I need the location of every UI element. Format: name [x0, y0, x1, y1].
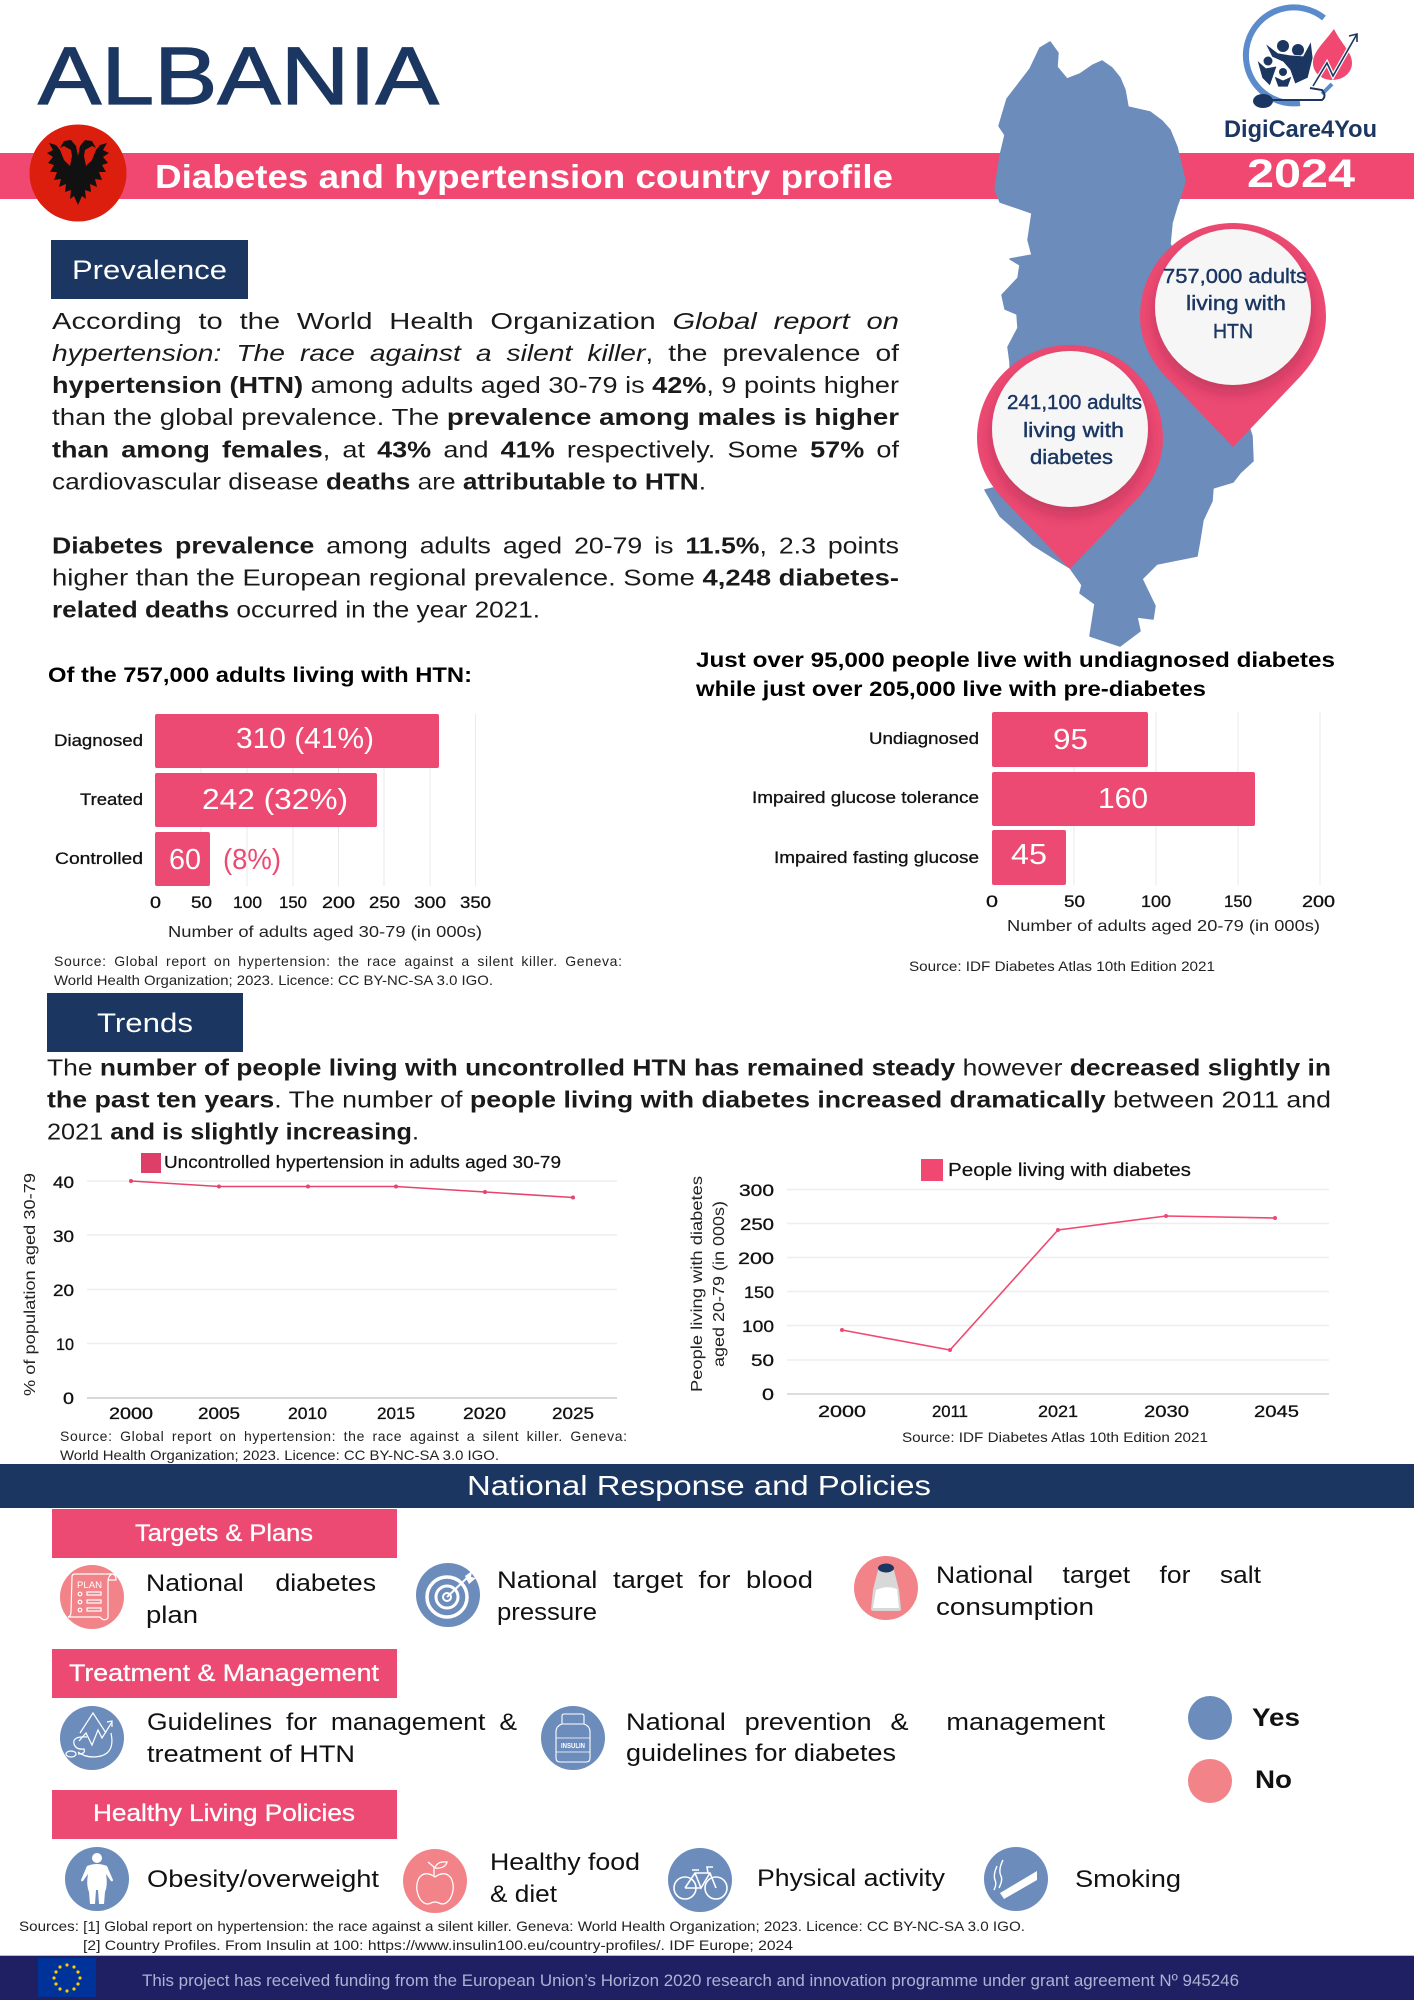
text: healthy food and diet: Healthy food — [490, 1849, 640, 1876]
title: ALBANIA — [38, 31, 439, 122]
bar chart: HTN care cascade: Number of adults aged 30-79 (in 000s) — [168, 924, 482, 941]
logo: DigiCare4You: DigiCare4You — [1224, 116, 1377, 143]
callout: HTN pin: 757,000 adults — [1163, 266, 1307, 288]
line chart: uncontrolled hypertension: 10 — [56, 1336, 74, 1354]
text: national target for blood pressure — [497, 1567, 813, 1626]
source: left line chart: World Health Organization; 2023. Licence: CC BY-NC-SA 3.0 IGO. — [60, 1447, 499, 1463]
text: national target for salt consumption: consumption — [936, 1594, 1094, 1621]
bar chart: diabetes and pre-diabetes: Impaired glucose tolerance — [752, 788, 979, 807]
bar chart: HTN care cascade: (8%) — [223, 844, 281, 876]
line chart: uncontrolled hypertension: 20 — [53, 1282, 74, 1300]
callout: diabetes pin: living with — [1023, 420, 1124, 442]
bar chart: HTN care cascade: 0 — [150, 894, 161, 912]
callout: diabetes pin — [977, 345, 1163, 569]
line chart: uncontrolled hypertension — [22, 1152, 617, 1423]
text block: sources: [2] Country Profiles. From Insulin at 100: https://www.insulin100.eu/country-profiles/. IDF Europe; 2024 — [83, 1937, 793, 1953]
bar chart: HTN care cascade: 350 — [460, 894, 491, 912]
map of Albania — [985, 42, 1253, 646]
line chart: people living with diabetes: 2021 — [1038, 1403, 1078, 1421]
line chart: uncontrolled hypertension: 2020 — [463, 1405, 506, 1423]
text block: hypertension prevalence: hypertension: The race against a silent killer , the prevalence of — [52, 340, 900, 366]
line chart: people living with diabetes: 2030 — [1144, 1403, 1189, 1421]
chart heading: undiagnosed diabetes — [695, 648, 1335, 701]
text block: hypertension prevalence: than among females , at 43% and 41% respectively. Some 57% of — [52, 436, 900, 462]
bar chart: HTN care cascade: 300 — [414, 894, 446, 912]
icon: insulin vial — [541, 1706, 605, 1770]
icon: EU flag — [38, 1958, 96, 1997]
icon: blood pressure target — [416, 1563, 480, 1627]
text block: hypertension prevalence — [52, 308, 900, 494]
icon: national diabetes plan — [60, 1565, 124, 1629]
source: right line chart: Source: IDF Diabetes Atlas 10th Edition 2021 — [902, 1429, 1208, 1445]
icon: HTN guidelines — [60, 1706, 124, 1770]
bar chart: diabetes and pre-diabetes: 150 — [1224, 893, 1252, 911]
text block: trends summary: the past ten years . The number of people living with diabetes increased dramatically between 2011 and — [47, 1086, 1331, 1112]
line chart: people living with diabetes: 100 — [742, 1318, 774, 1336]
bar chart: HTN care cascade: 150 — [279, 894, 307, 912]
bar chart: diabetes and pre-diabetes: Undiagnosed — [869, 729, 979, 748]
bar chart: diabetes and pre-diabetes — [752, 712, 1335, 935]
heading: Prevalence: Prevalence — [72, 255, 227, 285]
callout: diabetes pin: 241,100 adults — [1007, 392, 1142, 414]
chart heading: undiagnosed diabetes: Just over 95,000 people live with undiagnosed diabetes — [696, 648, 1335, 672]
icon: national diabetes plan: PLAN — [77, 1580, 102, 1591]
icon: bicycle — [668, 1848, 732, 1912]
heading: Targets & Plans: Targets & Plans — [135, 1520, 313, 1547]
bar chart: HTN care cascade: 60 — [169, 844, 201, 876]
heading: Healthy Living Policies — [52, 1790, 397, 1839]
bar chart: HTN care cascade: Controlled — [55, 849, 143, 868]
bar chart: diabetes and pre-diabetes: 160 — [1098, 783, 1148, 815]
source: left chart — [54, 953, 622, 988]
text: national target for blood pressure: National target for blood — [497, 1567, 813, 1594]
text: funding statement: This project has received funding from the European Union’s Horizon 2020 research and innovation programme under grant agreement Nº 945246 — [142, 1971, 1239, 1990]
heading: Healthy Living Policies: Healthy Living Policies — [93, 1800, 355, 1827]
text: physical activity: Physical activity — [757, 1865, 945, 1892]
icon: insulin vial: INSULIN — [561, 1741, 585, 1750]
icon: smoking — [984, 1847, 1048, 1911]
text: guidelines for HTN: treatment of HTN — [147, 1741, 355, 1768]
icon: obesity — [65, 1847, 129, 1911]
text block: hypertension prevalence: than the global prevalence. The prevalence among males is higher — [52, 404, 899, 430]
heading: Treatment & Management: Treatment & Management — [69, 1660, 379, 1687]
line chart: uncontrolled hypertension: 30 — [53, 1228, 74, 1246]
heading: Trends — [47, 993, 243, 1052]
text block: hypertension prevalence: According to the World Health Organization Global report on — [52, 308, 899, 334]
heading: Trends: Trends — [97, 1008, 193, 1038]
footer band — [0, 1955, 1414, 2000]
year: 2024 — [1247, 152, 1356, 196]
bar chart: diabetes and pre-diabetes: Number of adults aged 20-79 (in 000s) — [1007, 918, 1320, 935]
icon: Albanian flag circle — [30, 124, 126, 222]
text: national target for blood pressure: pressure — [497, 1599, 597, 1626]
callout: HTN pin — [1140, 223, 1326, 447]
text: national target for salt consumption: National target for salt — [936, 1562, 1261, 1589]
source: right chart: Source: IDF Diabetes Atlas 10th Edition 2021 — [909, 958, 1215, 974]
text block: trends summary — [47, 1054, 1331, 1144]
section band: National Response and Policies: National Response and Policies — [467, 1470, 931, 1501]
heading: Treatment & Management — [52, 1649, 397, 1698]
line chart: uncontrolled hypertension: 2025 — [552, 1405, 594, 1423]
bar chart: diabetes and pre-diabetes: Impaired fasting glucose — [774, 848, 979, 867]
line chart: people living with diabetes: People living with diabetes — [689, 1176, 706, 1392]
text block: sources — [19, 1918, 1025, 1953]
line chart: people living with diabetes: 50 — [751, 1352, 774, 1370]
callout: HTN pin: HTN — [1213, 321, 1253, 343]
bar chart: HTN care cascade: Diagnosed — [54, 731, 143, 750]
bar chart: HTN care cascade: 200 — [322, 894, 355, 912]
text: national prevention guidelines: guidelines for diabetes — [626, 1740, 896, 1767]
line chart: people living with diabetes: 200 — [738, 1250, 774, 1268]
text: guidelines for HTN — [147, 1709, 517, 1768]
line chart: people living with diabetes: 0 — [762, 1386, 774, 1404]
bar chart: diabetes and pre-diabetes: 45 — [1011, 839, 1047, 871]
line chart: people living with diabetes: 250 — [740, 1216, 774, 1234]
section band: National Response and Policies — [0, 1464, 1414, 1508]
source: left chart: World Health Organization; 2023. Licence: CC BY-NC-SA 3.0 IGO. — [54, 972, 493, 988]
bar chart: diabetes and pre-diabetes: 0 — [986, 893, 998, 911]
icon: salt shaker — [854, 1556, 918, 1620]
bar chart: diabetes and pre-diabetes: 100 — [1141, 893, 1171, 911]
legend: yes and no: Yes — [1252, 1704, 1300, 1732]
bar chart: HTN care cascade — [54, 714, 491, 941]
bar chart: diabetes and pre-diabetes: 200 — [1302, 893, 1335, 911]
callout: diabetes pin: diabetes — [1030, 447, 1113, 469]
bar chart: diabetes and pre-diabetes: 95 — [1053, 724, 1088, 756]
text block: trends summary: 2021 and is slightly increasing . — [47, 1118, 419, 1144]
icon: apple — [403, 1849, 467, 1913]
chart heading: HTN care cascade: Of the 757,000 adults living with HTN: — [48, 663, 472, 687]
line chart: uncontrolled hypertension: 2010 — [288, 1405, 327, 1423]
bar chart: HTN care cascade: Treated — [80, 790, 143, 809]
text: national prevention guidelines — [626, 1709, 1105, 1767]
heading: Prevalence — [51, 240, 248, 299]
legend: people living with diabetes: People living with diabetes — [948, 1160, 1191, 1180]
line chart: uncontrolled hypertension: 2015 — [377, 1405, 415, 1423]
line chart: people living with diabetes: 2000 — [818, 1403, 866, 1421]
bar chart: HTN care cascade: 242 (32%) — [202, 784, 348, 816]
bar chart: diabetes and pre-diabetes: 50 — [1064, 893, 1085, 911]
logo: DigiCare4You — [1224, 7, 1377, 143]
legend: yes and no — [1188, 1696, 1300, 1803]
text: healthy food and diet — [490, 1849, 640, 1908]
bar chart: HTN care cascade: 310 (41%) — [236, 723, 374, 755]
source: left chart: Source: Global report on hypertension: the race against a silent killer. Geneva: — [54, 953, 622, 969]
line chart: people living with diabetes: aged 20-79 (in 000s) — [711, 1201, 728, 1367]
bar chart: HTN care cascade: 100 — [233, 894, 262, 912]
line chart: uncontrolled hypertension: 40 — [53, 1174, 74, 1192]
text block: diabetes prevalence: Diabetes prevalence among adults aged 20-79 is 11.5% , 2.3 points — [52, 532, 899, 558]
text: healthy food and diet: & diet — [490, 1881, 557, 1908]
source: left line chart — [60, 1428, 627, 1463]
text block: trends summary: The number of people living with uncontrolled HTN has remained steady however decreased slightly in — [47, 1054, 1331, 1080]
banner band — [0, 153, 1414, 199]
text: national prevention guidelines: National prevention & management — [626, 1709, 1105, 1736]
line chart: people living with diabetes: 150 — [744, 1284, 774, 1302]
text: national target for salt consumption — [936, 1562, 1261, 1621]
text block: diabetes prevalence — [52, 532, 899, 622]
line chart: people living with diabetes: 2011 — [932, 1403, 968, 1421]
text block: diabetes prevalence: related deaths occurred in the year 2021. — [52, 596, 540, 622]
legend: yes and no: No — [1255, 1766, 1292, 1794]
bar chart: HTN care cascade: 250 — [369, 894, 400, 912]
line chart: people living with diabetes — [689, 1159, 1329, 1421]
line chart: people living with diabetes: 300 — [739, 1182, 774, 1200]
text block: diabetes prevalence: higher than the European regional prevalence. Some 4,248 diabetes- — [52, 564, 899, 590]
text: national diabetes plan: plan — [146, 1602, 198, 1629]
line chart: people living with diabetes: 2045 — [1254, 1403, 1299, 1421]
text: smoking: Smoking — [1075, 1866, 1181, 1893]
line chart: uncontrolled hypertension: % of population aged 30-79 — [22, 1173, 39, 1396]
callout: HTN pin: living with — [1186, 293, 1286, 315]
heading: Targets & Plans — [52, 1509, 397, 1558]
line chart: uncontrolled hypertension: 2005 — [198, 1405, 240, 1423]
text block: hypertension prevalence: hypertension (HTN) among adults aged 30-79 is 42% , 9 points higher — [52, 372, 899, 398]
source: left line chart: Source: Global report on hypertension: the race against a silent killer. Geneva: — [60, 1428, 627, 1444]
text: guidelines for HTN: Guidelines for management & — [147, 1709, 517, 1736]
chart heading: undiagnosed diabetes: while just over 205,000 live with pre-diabetes — [695, 677, 1206, 701]
banner heading: Diabetes and hypertension country profile — [155, 158, 893, 195]
text: national diabetes plan: National diabetes — [146, 1570, 376, 1597]
text block: hypertension prevalence: cardiovascular disease deaths are attributable to HTN . — [52, 468, 706, 494]
text: obesity: Obesity/overweight — [147, 1866, 379, 1893]
text: national diabetes plan — [146, 1570, 376, 1629]
legend: uncontrolled hypertension: Uncontrolled hypertension in adults aged 30-79 — [164, 1152, 561, 1172]
line chart: uncontrolled hypertension: 2000 — [109, 1405, 153, 1423]
text block: sources: Sources: [1] Global report on hypertension: the race against a silent killer. Geneva: World Health Organization; 2023. Licence: CC BY-NC-SA 3.0 IGO. — [19, 1918, 1025, 1934]
line chart: uncontrolled hypertension: 0 — [63, 1390, 74, 1408]
bar chart: HTN care cascade: 50 — [191, 894, 212, 912]
